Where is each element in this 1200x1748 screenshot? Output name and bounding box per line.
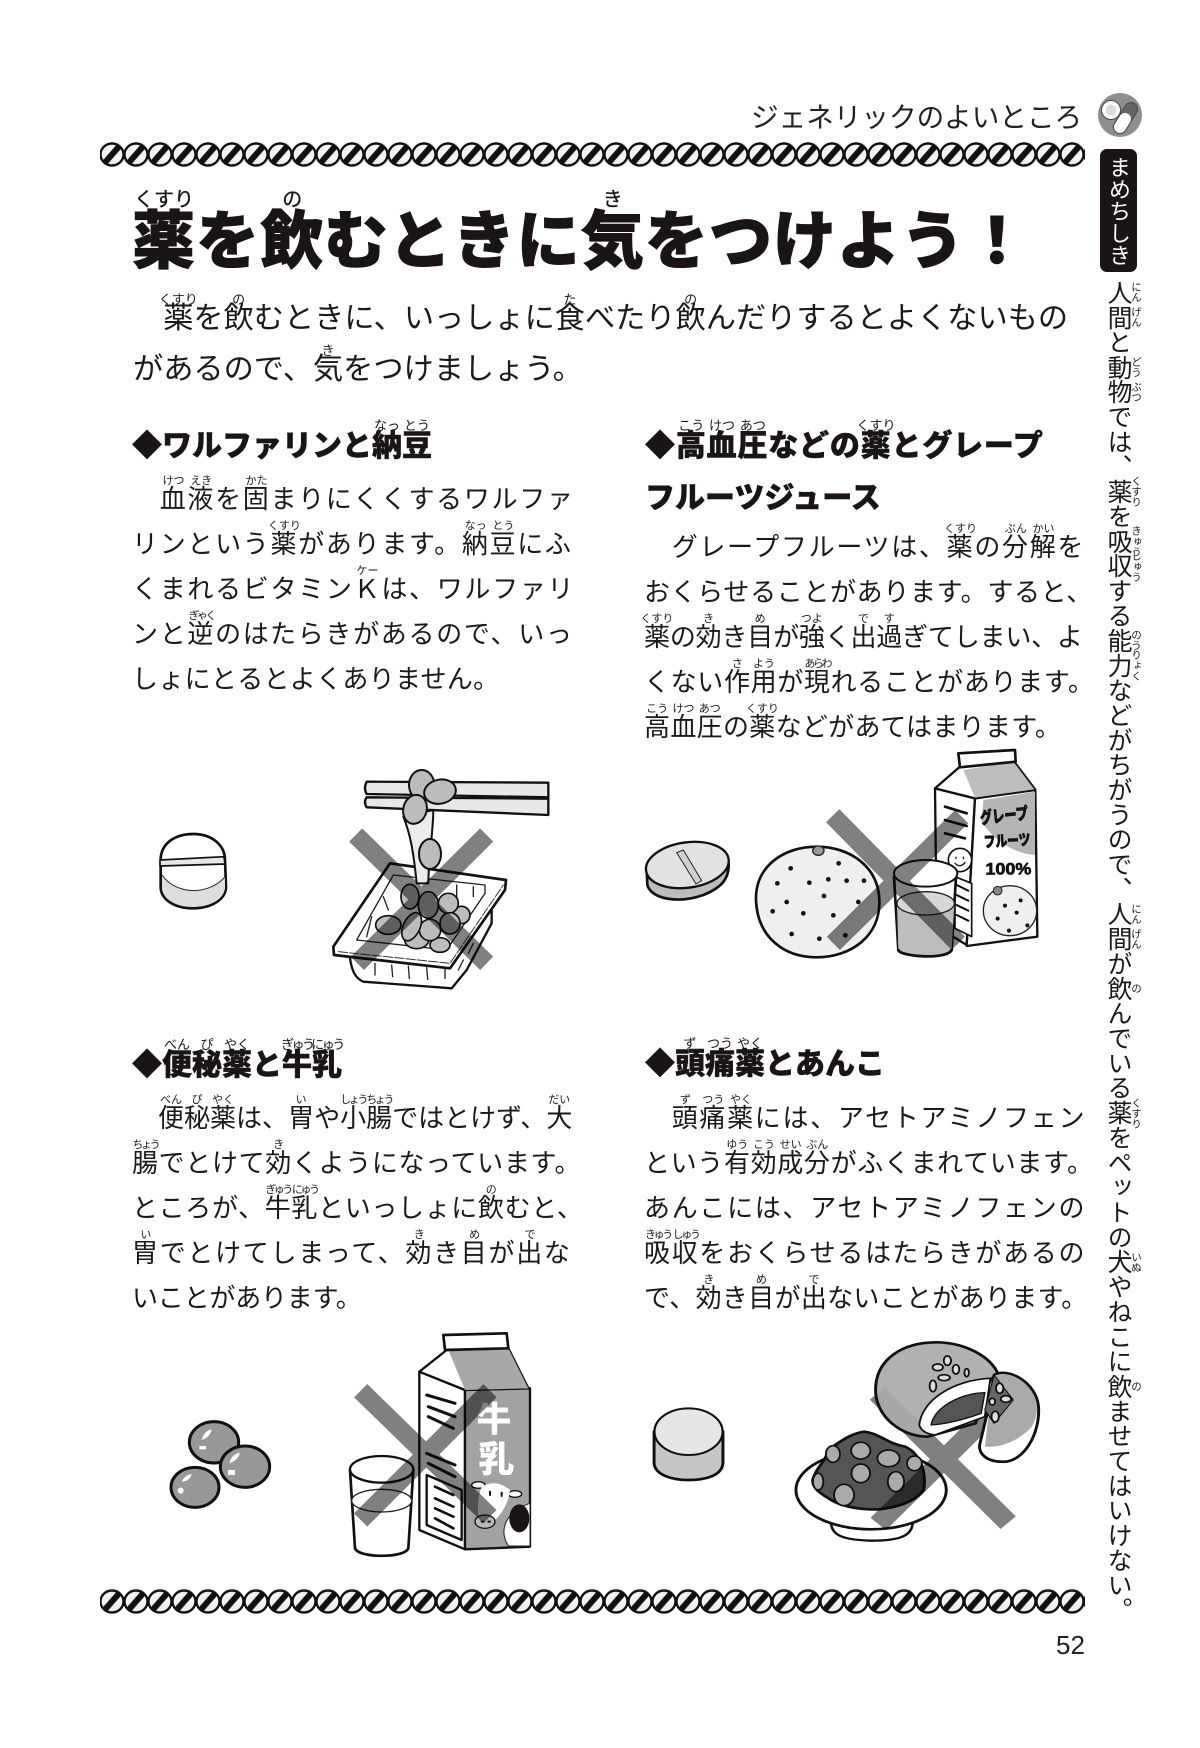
text: grapefruit: あらわ [804, 658, 830, 670]
heading: laxative and milk: ぎゅう [281, 1036, 313, 1052]
text: き [603, 189, 623, 211]
heading: laxative and milk: 乳 [312, 1049, 342, 1082]
intro text: を むときに、いっしょに べたり んだりするとよくないもの [193, 302, 1068, 335]
text: laxative and milk: 目 [461, 1238, 488, 1268]
side column: trivia text: と では、 を する などがちがうので、 が んでいる をペットの やねこに ませてはいけない。 [1104, 330, 1131, 1622]
text: grapefruit: 強 [799, 622, 825, 652]
text: laxative and milk: 便 [158, 1102, 184, 1132]
illustration: tablet, grapefruit and juice [643, 750, 1037, 957]
text: grapefruit: の などがあてはまります。 [723, 712, 1061, 742]
text: headache medicine and anko: 収 [672, 1238, 699, 1268]
side column: trivia text: 間 [1104, 926, 1131, 951]
text: warfarin and natto: リンという があります。 にふ [132, 528, 573, 558]
heading: blood pressure medicine and grapefruit juice: けつ [709, 418, 735, 432]
intro text: 飲 [224, 302, 254, 335]
text: laxative and milk: でとけてしまって、 き が な [160, 1238, 572, 1268]
side column: trivia text [1104, 280, 1142, 1622]
illustration: tablet and natto [160, 770, 548, 988]
text: laxative and milk: で [525, 1228, 536, 1240]
text: warfarin and natto: えき [190, 474, 212, 486]
text: grapefruit: よう [753, 658, 775, 670]
text: grapefruit: くすり [640, 612, 673, 624]
text: headache medicine and anko: という がふくまれています。 [644, 1148, 1094, 1178]
intro text: くすり [159, 292, 198, 306]
text: laxative and milk [132, 1094, 584, 1312]
text: げん [1130, 307, 1142, 328]
text: grapefruit: くない が れることがあります。 [644, 666, 1094, 696]
text: headache medicine and anko [644, 1094, 1094, 1312]
natto strand [403, 810, 433, 883]
text: headache medicine and anko: こう [753, 1138, 775, 1150]
heading: headache medicine and anko: 薬 [735, 1048, 765, 1081]
intro text: 食 [555, 302, 585, 335]
cow [472, 1482, 530, 1546]
text: grapefruit: で [858, 612, 869, 624]
heading: laxative and milk: 牛 [282, 1049, 312, 1082]
text: laxative and milk: だい [548, 1094, 570, 1106]
text: laxative and milk: でとけて くようになっています。 [159, 1148, 581, 1178]
text: grapefruit: 用 [751, 666, 777, 696]
carton label: 100% [985, 860, 1032, 879]
text: headache medicine and anko: 目 [748, 1282, 774, 1312]
milk carton [419, 1333, 530, 1549]
text: warfarin and natto: かた [246, 474, 268, 486]
text: warfarin and natto: Ｋ [354, 574, 381, 604]
heading: laxative and milk: ◆ と [132, 1049, 282, 1082]
text: headache medicine and anko: しゅう [673, 1228, 698, 1240]
icon: round pills [171, 1422, 270, 1507]
text: warfarin and natto: くすり [268, 520, 301, 532]
text: grapefruit: め [755, 612, 766, 624]
text: headache medicine and anko: あんこには、アセトアミノフェンの [644, 1192, 1086, 1222]
intro text: た [563, 292, 576, 306]
icon: pills badge [1098, 93, 1142, 137]
text: headache medicine and anko: ぶん [806, 1138, 828, 1150]
icon: cylinder tablet [654, 1408, 723, 1480]
text: warfarin and natto: 薬 [271, 528, 298, 558]
text: grapefruit: こう [646, 702, 668, 714]
text: grapefruit: 薬 [644, 622, 670, 652]
title: 薬 [132, 207, 196, 277]
text: grapefruit: くすり [746, 702, 779, 714]
text: りょく [1130, 650, 1142, 681]
text: grapefruit: かい [1033, 522, 1055, 534]
text: くすり [134, 189, 194, 211]
text: の [1130, 1381, 1142, 1391]
text: grapefruit: 作 [724, 666, 751, 696]
text: grapefruit: 薬 [749, 712, 776, 742]
text: grapefruit: あつ [699, 702, 721, 714]
text: headache medicine and anko: 有 [724, 1148, 751, 1178]
illustration: headache tablet and anko [654, 1342, 1039, 1541]
text: grapefruit [640, 522, 1094, 742]
plate [796, 1451, 946, 1541]
glass of juice [894, 860, 957, 956]
side column: trivia text: 飲 [1104, 1374, 1131, 1398]
heading: blood pressure medicine and grapefruit juice: くすり [857, 418, 896, 432]
side column: trivia text: 能 [1104, 628, 1131, 653]
text: grapefruit: の き が く ぎてしまい、よ [670, 622, 1083, 652]
side column: trivia text: 飲 [1104, 976, 1131, 1001]
text: laxative and milk: ぎゅう [265, 1184, 291, 1196]
natto beans in tray [376, 884, 470, 952]
text: headache medicine and anko: 成 [777, 1148, 804, 1178]
natto beans on chopsticks [400, 770, 458, 869]
heading: blood pressure medicine and grapefruit juice: ◆ などの とグレープ [645, 430, 1044, 463]
heading: warfarin and natto: とう [404, 418, 430, 432]
text: laxative and milk: は、 や ではとけず、 [236, 1102, 546, 1132]
text: headache medicine and anko: 出 [801, 1282, 827, 1312]
side column: trivia text: 薬 [1104, 1100, 1131, 1125]
text: grapefruit: 薬 [947, 532, 974, 562]
heading: blood pressure medicine and grapefruit juice: あつ [740, 418, 766, 432]
text: の [1130, 983, 1142, 994]
text: grapefruit: おくらせることがあります。すると、 [644, 576, 1093, 606]
text: のう [1130, 630, 1142, 651]
intro text: き [322, 342, 335, 358]
side tab: mamechishiki: まめちしき [1106, 156, 1131, 266]
text: ぶつ [1130, 381, 1142, 402]
text: laxative and milk: いことがあります。 [132, 1282, 362, 1312]
heading: laxative and milk: 薬 [222, 1049, 252, 1082]
heading: warfarin and natto [132, 418, 432, 463]
text: warfarin and natto: 液 [187, 484, 215, 514]
text: grapefruit: ぶん [1005, 522, 1027, 534]
text: laxative and milk: べん [160, 1094, 182, 1106]
text: laxative and milk: ところが、 といっしょに むと、 [132, 1192, 584, 1222]
heading: laxative and milk: べん [164, 1036, 190, 1052]
text: laxative and milk: い [140, 1228, 151, 1240]
heading: blood pressure medicine and grapefruit juice: 血 [707, 430, 737, 463]
text: grapefruit: グレープフルーツは、 の を [672, 532, 1085, 562]
text: headache medicine and anko: やく [730, 1094, 752, 1106]
text: headache medicine and anko: め [756, 1274, 767, 1286]
heading: blood pressure medicine and grapefruit juice: 薬 [861, 430, 891, 463]
text: laxative and milk: にゅう [292, 1184, 318, 1196]
text: warfarin and natto: ンと のはたらきがあるので、いっ [132, 618, 574, 648]
text: laxative and milk: 大 [546, 1102, 572, 1132]
text: warfarin and natto: しょにとるとよくありません。 [132, 664, 499, 694]
intro text: の [232, 292, 245, 306]
text: grapefruit: 分 [1002, 532, 1030, 562]
text: laxative and milk: 効 [265, 1148, 292, 1178]
text: warfarin and natto: けつ [163, 474, 185, 486]
text: どう [1130, 356, 1142, 378]
natto tray [333, 863, 506, 988]
grapefruit [756, 846, 879, 957]
side column: trivia text: 吸 [1104, 529, 1131, 553]
text: laxative and milk: 牛 [265, 1192, 291, 1222]
text: grapefruit: 過 [876, 622, 902, 652]
heading: warfarin and natto: 豆 [402, 430, 432, 463]
text: headache medicine and anko: きゅう [645, 1228, 671, 1240]
text: laxative and milk: 出 [516, 1238, 544, 1268]
text: warfarin and natto: ぎゃく [188, 610, 214, 622]
text: warfarin and natto: 逆 [187, 618, 215, 648]
text: headache medicine and anko: 痛 [699, 1102, 727, 1132]
carton label: フルーツ [983, 832, 1031, 851]
chopsticks [365, 782, 548, 815]
cross mark [361, 1391, 490, 1520]
cross mark [833, 816, 962, 943]
side column: trivia text: 動 [1104, 355, 1131, 379]
bottom rope divider [100, 1589, 1085, 1614]
text: headache medicine and anko: 効 [696, 1282, 722, 1312]
text: laxative and milk: ちょう [132, 1138, 158, 1150]
text: headache medicine and anko: 分 [804, 1148, 831, 1178]
text: headache medicine and anko: ゆう [726, 1138, 748, 1150]
heading: headache medicine and anko: 頭 [675, 1048, 705, 1081]
text: laxative and milk: 胃 [288, 1102, 314, 1132]
text: headache medicine and anko: ず [680, 1094, 691, 1106]
heading: headache medicine and anko: 痛 [705, 1048, 735, 1081]
text: laxative and milk: 腸 [132, 1148, 159, 1178]
side column: trivia text: 収 [1104, 553, 1131, 578]
text: くすり [1130, 1097, 1142, 1128]
heading: warfarin and natto: ◆ワルファリンと [132, 430, 372, 463]
heading: laxative and milk: 便 [162, 1049, 192, 1082]
text: げん [1130, 928, 1142, 949]
text: の [282, 189, 302, 211]
heading: blood pressure medicine and grapefruit juice: フルーツジュース [645, 482, 881, 515]
text: headache medicine and anko: で [808, 1274, 819, 1286]
text: warfarin and natto: とう [492, 520, 514, 532]
milk label: 牛 [477, 1402, 511, 1440]
text: にん [1130, 903, 1142, 924]
side tab: mamechishiki [1100, 149, 1137, 272]
text: いぬ [1130, 1251, 1142, 1272]
text: laxative and milk: き [273, 1138, 284, 1150]
side column: trivia text: 物 [1104, 379, 1131, 404]
icon: oval tablet [643, 837, 732, 899]
heading: laxative and milk: にゅう [311, 1036, 343, 1052]
text: laxative and milk: い [296, 1094, 307, 1106]
icon: tablet [160, 834, 226, 908]
cross mark [356, 835, 487, 963]
text: headache medicine and anko: 薬 [727, 1102, 755, 1132]
glass of milk [350, 1456, 413, 1556]
text: grapefruit: 現 [804, 666, 831, 696]
text: くすり [1130, 476, 1142, 507]
juice carton [935, 750, 1037, 946]
text: warfarin and natto: なっ [465, 520, 487, 532]
intro text: 気 [313, 353, 343, 386]
text: warfarin and natto: ケー [356, 564, 378, 576]
text: grapefruit: 出 [850, 622, 876, 652]
title: 飲 [260, 207, 324, 277]
side column: trivia text: 犬 [1104, 1249, 1131, 1274]
text: laxative and milk: 胃 [132, 1238, 160, 1268]
heading: warfarin and natto: 納 [372, 430, 402, 463]
text: laxative and milk: やく [212, 1094, 234, 1106]
side column: trivia text: 人 [1104, 901, 1131, 926]
text: laxative and milk: の [486, 1184, 497, 1196]
text: laxative and milk: ちょう [366, 1094, 392, 1106]
intro text: の [684, 292, 697, 306]
text: grapefruit: つよ [801, 612, 823, 624]
text: warfarin and natto: 豆 [490, 528, 517, 558]
side column: trivia text: 間 [1104, 305, 1131, 330]
text: warfarin and natto: 納 [462, 528, 490, 558]
text: grapefruit: す [884, 612, 895, 624]
heading: blood pressure medicine and grapefruit juice: 圧 [737, 430, 768, 463]
text: headache medicine and anko: をおくらせるはたらきがあるの [699, 1238, 1086, 1268]
title: を むときに をつけよう！ [196, 207, 1029, 277]
heading: headache medicine and anko: つう [707, 1036, 733, 1050]
text: headache medicine and anko: 頭 [672, 1102, 699, 1132]
text: grapefruit: くすり [944, 522, 977, 534]
running header: ジェネリックのよいところ [751, 102, 1082, 133]
text: headache medicine and anko: には、アセトアミノフェン [755, 1102, 1086, 1132]
heading: laxative and milk: やく [224, 1036, 250, 1052]
text: warfarin and natto: 固 [243, 484, 270, 514]
text: warfarin and natto [132, 474, 575, 694]
intro text: 飲 [676, 302, 706, 335]
intro text: 薬 [163, 302, 193, 335]
title: 気 [581, 207, 645, 277]
text: headache medicine and anko: 効 [751, 1148, 777, 1178]
text: laxative and milk: しょう [340, 1094, 366, 1106]
side column: trivia text: 薬 [1104, 479, 1131, 504]
text: grapefruit: 効 [696, 622, 721, 652]
heading: headache medicine and anko: ず [683, 1036, 697, 1050]
heading: blood pressure medicine and grapefruit juice: 高 [676, 430, 707, 463]
text: laxative and milk: め [469, 1228, 480, 1240]
side column: trivia text: 力 [1104, 653, 1131, 678]
text: laxative and milk: 小 [340, 1102, 366, 1132]
page number: 52 [1056, 1630, 1085, 1660]
heading: laxative and milk: 秘 [192, 1049, 222, 1082]
text: headache medicine and anko: せい [780, 1138, 802, 1150]
text: headache medicine and anko: き [703, 1274, 714, 1286]
text: laxative and milk: 秘 [184, 1102, 210, 1132]
milk carton: 乳 [478, 1439, 514, 1480]
text: warfarin and natto: くまれるビタミン は、ワルファリ [132, 574, 575, 604]
heading: blood pressure medicine and grapefruit juice: こう [678, 418, 704, 432]
heading: laxative and milk: ぴ [200, 1036, 214, 1052]
text: grapefruit: 圧 [697, 712, 723, 742]
carton label: グレープ [979, 803, 1029, 828]
text: warfarin and natto: 血 [160, 484, 187, 514]
intro text: があるので、 をつけましょう。 [133, 353, 583, 386]
text: しゅう [1130, 550, 1142, 582]
text: laxative and milk: 効 [405, 1238, 433, 1268]
text: headache medicine and anko: 吸 [644, 1238, 672, 1268]
heading: headache medicine and anko: ◆ とあんこ [645, 1048, 885, 1081]
text: laxative and milk: 乳 [291, 1192, 318, 1222]
cross mark [877, 1393, 1008, 1524]
text: grapefruit: 血 [670, 712, 697, 742]
manju with bean paste [876, 1342, 1039, 1462]
heading: blood pressure medicine and grapefruit juice [645, 418, 1044, 515]
carton label [979, 803, 1032, 879]
text: laxative and milk: 薬 [210, 1102, 236, 1132]
text: laxative and milk: 飲 [478, 1192, 505, 1222]
text: grapefruit: 解 [1030, 532, 1057, 562]
text: grapefruit: 高 [644, 712, 670, 742]
heading: headache medicine and anko: やく [737, 1036, 763, 1050]
text: grapefruit: き [703, 612, 714, 624]
text: laxative and milk: ぴ [192, 1094, 203, 1106]
text: きゅう [1130, 525, 1142, 557]
heading: laxative and milk [132, 1036, 343, 1082]
heading: warfarin and natto: なっ [374, 418, 400, 432]
intro text [133, 292, 1068, 386]
text: grapefruit: けつ [672, 702, 694, 714]
top rope divider [100, 142, 1085, 167]
text: laxative and milk: き [414, 1228, 425, 1240]
text: grapefruit: さ [732, 658, 743, 670]
text: headache medicine and anko: つう [702, 1094, 724, 1106]
text: warfarin and natto: を まりにくくするワルファ [215, 484, 575, 514]
side column: trivia text: 人 [1104, 280, 1131, 305]
text: headache medicine and anko: で、 き が ないことがあります。 [644, 1282, 1088, 1312]
text: にん [1130, 282, 1142, 303]
text: grapefruit: 目 [747, 622, 773, 652]
illustration: laxative tablets and milk [171, 1333, 530, 1556]
anko sweets on plate [813, 1432, 924, 1509]
text: laxative and milk: 腸 [366, 1102, 392, 1132]
